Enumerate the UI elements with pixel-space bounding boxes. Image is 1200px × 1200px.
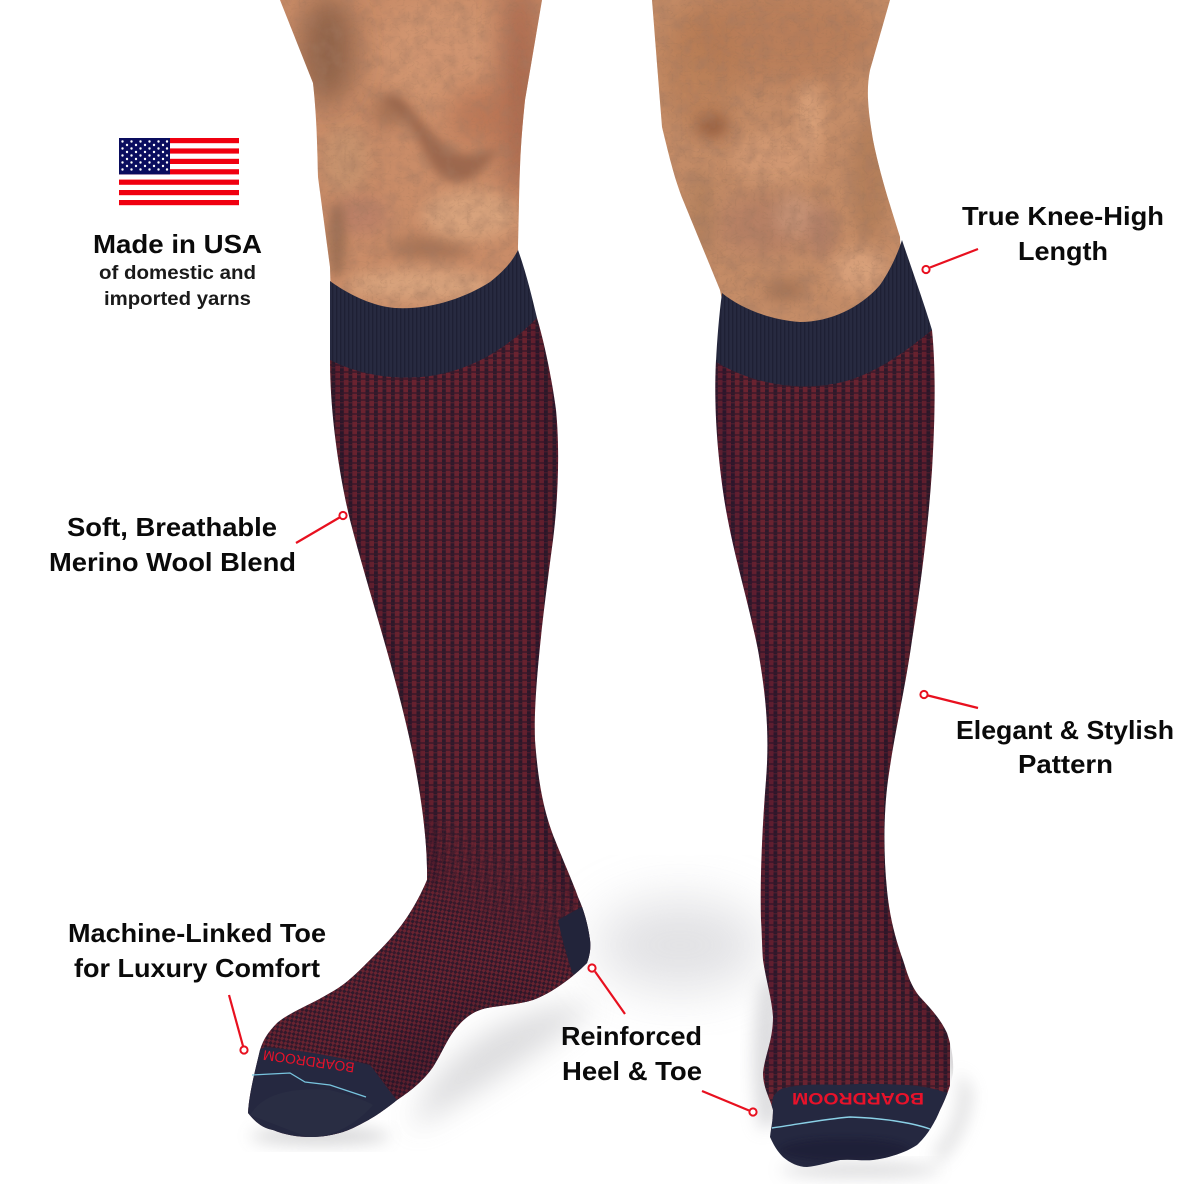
text block: made in usa: imported yarns: [104, 289, 251, 310]
right sock logo: BOARDROOM: [792, 1089, 924, 1108]
left toe cap: [240, 1047, 397, 1140]
text block: made in usa: Made in USA: [93, 229, 262, 259]
callout: elegant pattern: Pattern: [1018, 749, 1113, 779]
callout: merino wool blend: Merino Wool Blend: [49, 547, 296, 577]
left stitch line: [252, 1073, 366, 1097]
callout: reinforced heel and toe: Heel & Toe: [562, 1056, 702, 1086]
right thigh and knee skin: [652, 0, 900, 322]
callout: merino wool blend: [49, 512, 347, 577]
callout: reinforced heel and toe: Reinforced: [561, 1021, 702, 1051]
floor shadows: [250, 900, 972, 1177]
right cuff: [716, 240, 932, 386]
left sock leg and foot: [248, 318, 590, 1137]
callout: true knee-high length: [922, 201, 1164, 273]
text block: made in usa: [93, 229, 262, 310]
callout: elegant pattern: [920, 691, 1174, 779]
callout: true knee-high length: True Knee-High: [962, 201, 1164, 231]
left leg: [230, 0, 610, 1160]
left cuff: [330, 250, 537, 378]
callout: machine-linked toe: [68, 918, 326, 1054]
right toe cap: [770, 1084, 948, 1167]
icon: american flag: [119, 138, 239, 205]
callout: true knee-high length: Length: [1018, 236, 1108, 266]
left sock logo: BOARDROOM: [262, 1047, 355, 1076]
callout: machine-linked toe: Machine-Linked Toe: [68, 918, 326, 948]
callout: machine-linked toe: for Luxury Comfort: [74, 953, 320, 983]
left heel patch: [558, 906, 590, 975]
left thigh and knee skin: [280, 0, 542, 308]
callout: merino wool blend: Soft, Breathable: [67, 512, 277, 542]
text block: made in usa: of domestic and: [99, 263, 256, 284]
right stitch line: [772, 1117, 930, 1129]
callout: reinforced heel and toe: [561, 964, 757, 1116]
callout: elegant pattern: Elegant & Stylish: [956, 715, 1174, 745]
right leg: [640, 0, 953, 1175]
right sock leg and foot: [700, 320, 953, 1175]
